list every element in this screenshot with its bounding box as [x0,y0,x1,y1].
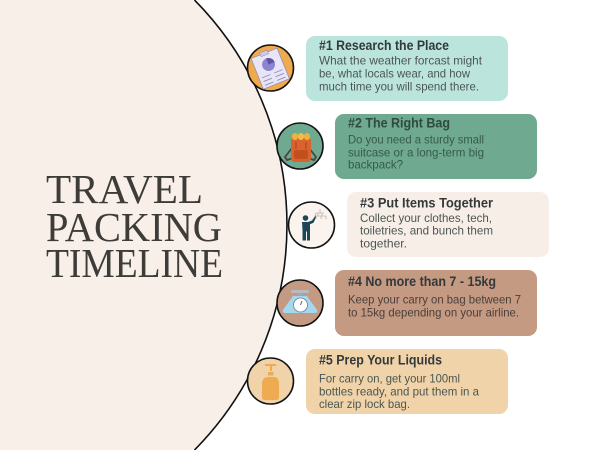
panel: step 2 the right bag: Do you need a sturdy small [348,132,484,146]
title: TRAVEL [46,166,203,212]
icon: pump bottle [248,358,294,404]
panel: step 5 prep your liquids: bottles ready, and put them in a [319,384,479,398]
icon: person with diagram [288,202,334,248]
panel: step 1 research the place: be, what locals wear, and how [319,67,470,81]
panel: step 2 the right bag [335,114,537,179]
panel: step 5 prep your liquids: clear zip lock bag. [319,397,410,411]
panel: step 3 put items together: #3 Put Items Together [360,195,494,210]
panel: step 4 no more than 7 - 15kg: Keep your carry on bag between 7 [348,293,521,307]
icon: luggage scale [277,280,323,326]
icon: backpack [277,123,323,169]
panel: step 1 research the place: much time you will spend there. [319,79,479,93]
panel: step 3 put items together: toiletries, and bunch them [360,224,493,238]
panel: step 3 put items together: Collect your clothes, tech, [360,211,492,225]
panel: step 2 the right bag: suitcase or a long-term big [348,145,484,159]
panel: step 5 prep your liquids: #5 Prep Your Liquids [319,353,442,368]
panel: step 4 no more than 7 - 15kg: #4 No more than 7 - 15kg [348,274,496,289]
panel: step 4 no more than 7 - 15kg: to 15kg depending on your airline. [348,306,519,320]
panel: step 1 research the place [306,36,508,101]
panel: step 1 research the place: #1 Research the Place [319,38,449,53]
panel: step 3 put items together [347,192,549,257]
title: TIMELINE [46,240,223,286]
background semicircle [0,0,287,450]
title [46,166,223,286]
panel: step 5 prep your liquids: For carry on, get your 100ml [319,371,460,385]
panel: step 5 prep your liquids [306,349,508,414]
icon: clipboard report [248,45,294,91]
panel: step 3 put items together: together. [360,236,407,250]
panel: step 2 the right bag: #2 The Right Bag [348,116,450,131]
panel: step 4 no more than 7 - 15kg [335,270,537,336]
panel: step 1 research the place: What the weather forcast might [319,54,483,68]
title: PACKING [46,204,222,250]
panel: step 2 the right bag: backpack? [348,158,403,172]
